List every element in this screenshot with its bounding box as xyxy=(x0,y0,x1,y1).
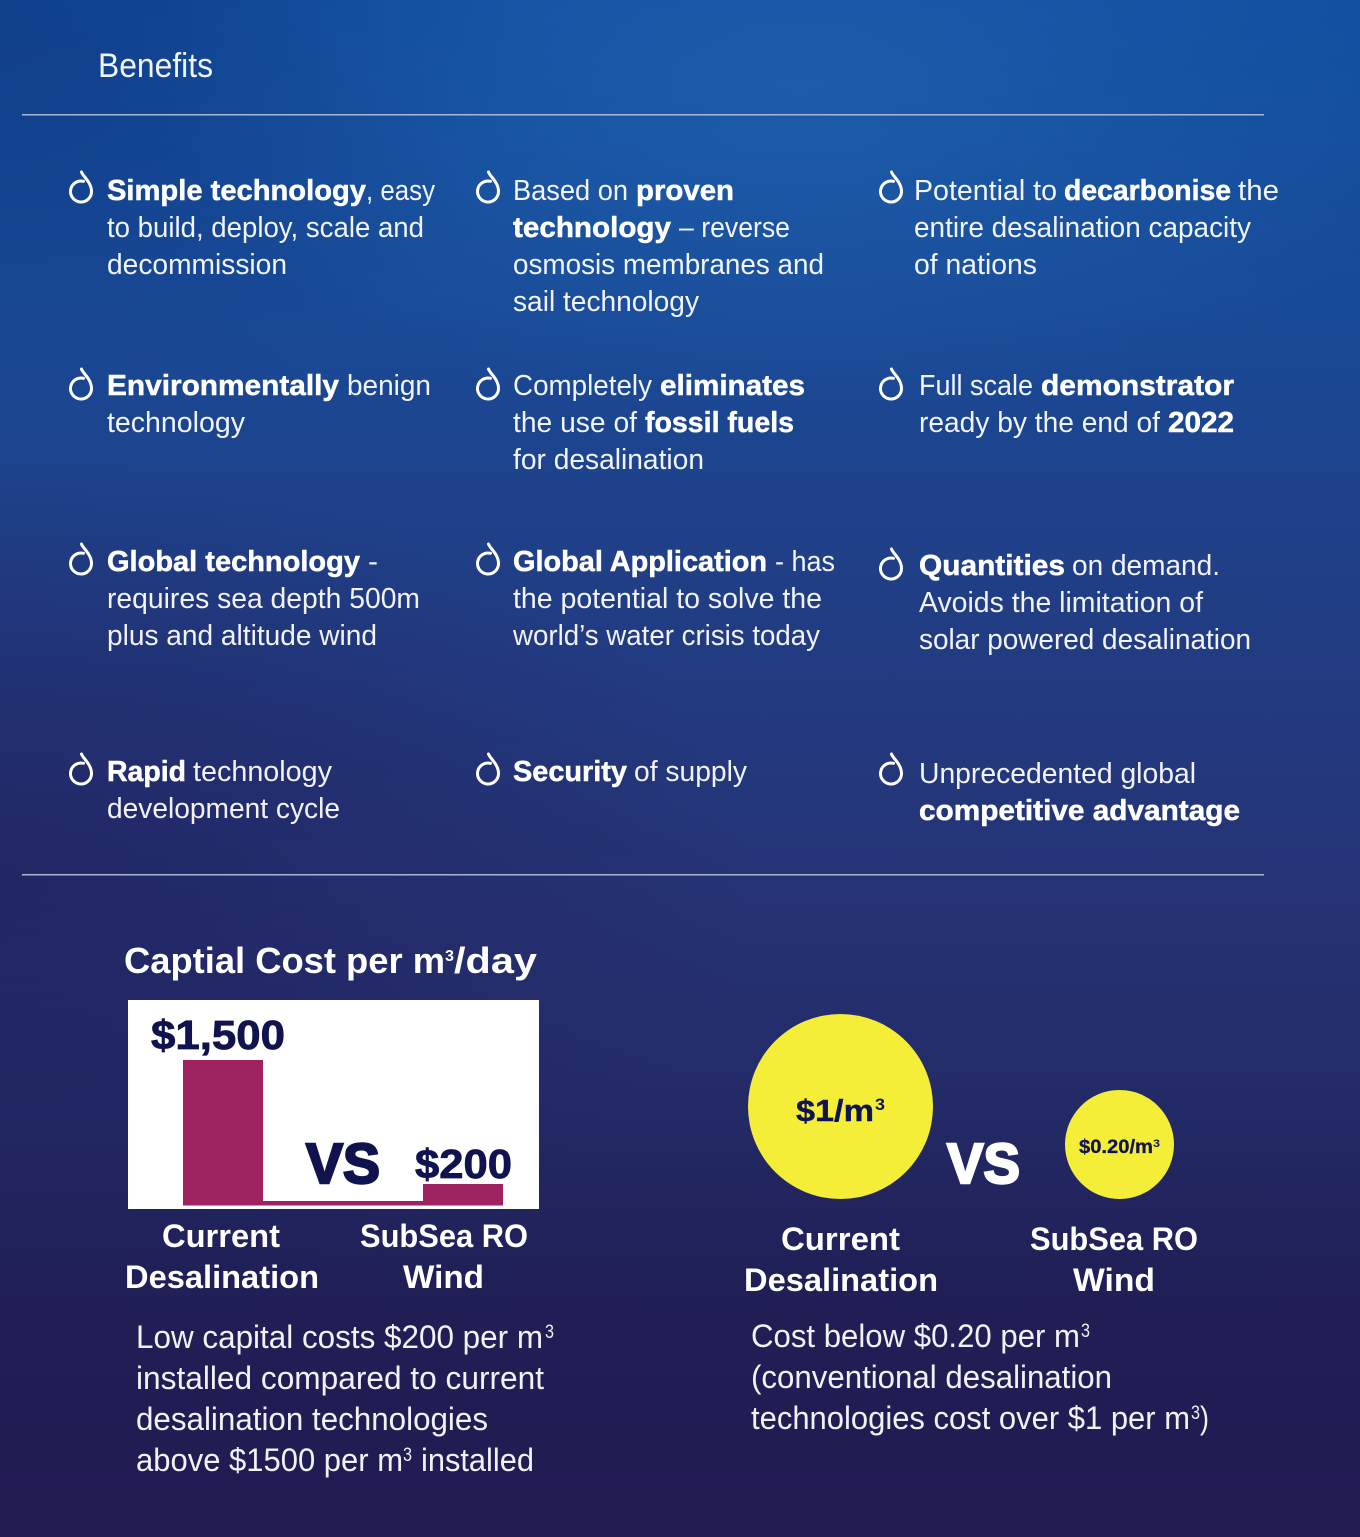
benefit: demonstrator: 2022 xyxy=(1168,407,1234,439)
benefit: proven technology: Based on xyxy=(513,175,628,207)
benefit: simple technology: to build, deploy, scale and xyxy=(107,212,424,244)
benefit: competitive advantage: Unprecedented global xyxy=(919,758,1196,790)
benefit: quantities on demand: solar powered desalination xyxy=(919,624,1251,656)
label: VS: VS xyxy=(947,1132,1020,1196)
circle: current desalination $1/m3: $1/m xyxy=(796,1093,874,1128)
chart axis labels: SubSea RO xyxy=(360,1218,528,1254)
benefit: decarbonise: decarbonise xyxy=(1064,175,1231,207)
chart title: 3 xyxy=(445,948,454,965)
benefit: demonstrator xyxy=(880,369,1234,439)
benefit: eliminates fossil fuels xyxy=(478,369,805,476)
circle: current desalination $1/m3 xyxy=(748,1014,933,1199)
operating cost description: ) xyxy=(1200,1400,1209,1436)
benefit: global application: the potential to solve the xyxy=(513,583,822,615)
bar chart: capital cost xyxy=(128,1000,539,1209)
benefit: quantities on demand: Avoids the limitation of xyxy=(919,587,1204,619)
operating cost description: technologies cost over $1 per m xyxy=(751,1400,1190,1436)
chart axis labels xyxy=(125,1218,528,1295)
benefit: rapid development xyxy=(70,754,340,825)
benefit: quantities on demand xyxy=(880,549,1251,656)
benefit: proven technology xyxy=(478,172,824,318)
benefit: rapid development: development cycle xyxy=(107,793,340,825)
benefit: proven technology: proven xyxy=(636,175,734,207)
benefit: decarbonise: entire desalination capacity xyxy=(914,212,1251,244)
benefit: demonstrator: demonstrator xyxy=(1041,370,1234,402)
label: VS: VS xyxy=(306,1132,380,1196)
benefit: eliminates fossil fuels: for desalination xyxy=(513,444,704,476)
benefit: simple technology: , easy xyxy=(366,175,435,207)
benefit: simple technology: Simple technology xyxy=(107,175,366,207)
benefit: security of supply: of supply xyxy=(634,756,747,788)
benefit: decarbonise: the xyxy=(1238,175,1279,207)
benefit: global technology xyxy=(70,544,420,652)
benefit: decarbonise: Potential to xyxy=(914,175,1057,207)
chart axis labels: Current xyxy=(162,1218,280,1254)
benefit: decarbonise: of nations xyxy=(914,249,1037,281)
chart title: Captial Cost per m xyxy=(124,940,445,981)
benefit: rapid development: Rapid xyxy=(107,756,186,788)
circle labels: Desalination xyxy=(744,1262,938,1298)
benefit: global technology: Global technology xyxy=(107,546,360,578)
benefit: global application: Global Application xyxy=(513,546,767,578)
benefit: global application: - has xyxy=(775,546,835,578)
benefit: competitive advantage xyxy=(880,754,1240,827)
chart axis labels: Desalination xyxy=(125,1259,319,1295)
circle labels xyxy=(744,1221,1198,1298)
benefit: eliminates fossil fuels: Completely xyxy=(513,370,652,402)
benefit: global application: world’s water crisis today xyxy=(512,620,820,652)
circle: subsea $0.20/m3 xyxy=(1065,1090,1174,1199)
benefit: rapid development: technology xyxy=(193,756,332,788)
benefit: global technology: requires sea depth 500m xyxy=(107,583,420,615)
benefit: proven technology: technology xyxy=(513,212,671,244)
capital cost description: 3 xyxy=(545,1322,554,1343)
benefit: proven technology: sail technology xyxy=(513,286,699,318)
circle labels: SubSea RO xyxy=(1030,1221,1198,1257)
benefit: global application xyxy=(478,544,835,652)
operating cost description: 3 xyxy=(1081,1321,1090,1342)
operating cost description: Cost below $0.20 per m xyxy=(751,1318,1080,1354)
benefit: demonstrator: Full scale xyxy=(919,370,1033,402)
benefit: global technology: - xyxy=(368,546,378,578)
benefit: eliminates fossil fuels: eliminates xyxy=(660,370,805,402)
benefit: simple technology: decommission xyxy=(107,249,287,281)
chart title: /day xyxy=(454,940,537,981)
bar: subsea xyxy=(423,1184,503,1206)
value: $200: $200 xyxy=(415,1141,512,1187)
capital cost description: Low capital costs $200 per m xyxy=(136,1319,543,1355)
circle labels: Wind xyxy=(1073,1262,1155,1298)
benefit: environmentally benign: benign xyxy=(347,370,431,402)
benefit: competitive advantage: competitive advantage xyxy=(919,795,1240,827)
heading: Benefits: Benefits xyxy=(98,47,213,85)
operating cost description xyxy=(751,1318,1209,1436)
benefit: proven technology: osmosis membranes and xyxy=(513,249,824,281)
benefit: environmentally benign: technology xyxy=(107,407,245,439)
operating cost description: 3 xyxy=(1191,1403,1200,1424)
benefit: decarbonise xyxy=(880,172,1279,281)
benefit: proven technology: – reverse xyxy=(679,212,790,244)
capital cost description: installed compared to current xyxy=(136,1360,544,1396)
benefit: environmentally benign xyxy=(70,369,431,439)
circle: subsea $0.20/m3: $0.20/m xyxy=(1079,1137,1153,1158)
benefit: eliminates fossil fuels: the use of xyxy=(513,407,638,439)
capital cost description xyxy=(136,1319,554,1478)
circle: subsea $0.20/m3: 3 xyxy=(1153,1138,1160,1150)
value: $1,500: $1,500 xyxy=(151,1012,285,1058)
capital cost description: 3 xyxy=(403,1445,412,1466)
capital cost description: above $1500 per m xyxy=(136,1442,403,1478)
chart axis labels: Wind xyxy=(403,1259,484,1295)
benefit: demonstrator: ready by the end of xyxy=(919,407,1161,439)
capital cost description: desalination technologies xyxy=(136,1401,488,1437)
operating cost description: (conventional desalination xyxy=(751,1359,1112,1395)
benefit: quantities on demand: Quantities xyxy=(919,550,1065,582)
benefit: environmentally benign: Environmentally xyxy=(107,370,339,402)
capital cost description: installed xyxy=(421,1442,534,1478)
benefit: eliminates fossil fuels: fossil fuels xyxy=(645,407,794,439)
benefit: security of supply: Security xyxy=(513,756,627,788)
benefit: simple technology xyxy=(70,172,435,281)
benefit: security of supply xyxy=(478,754,747,788)
circle labels: Current xyxy=(781,1221,900,1257)
circle: current desalination $1/m3: 3 xyxy=(875,1095,885,1114)
benefit: quantities on demand: on demand. xyxy=(1072,550,1220,582)
bar: current desalination xyxy=(183,1060,263,1206)
benefit: global technology: plus and altitude wind xyxy=(107,620,377,652)
